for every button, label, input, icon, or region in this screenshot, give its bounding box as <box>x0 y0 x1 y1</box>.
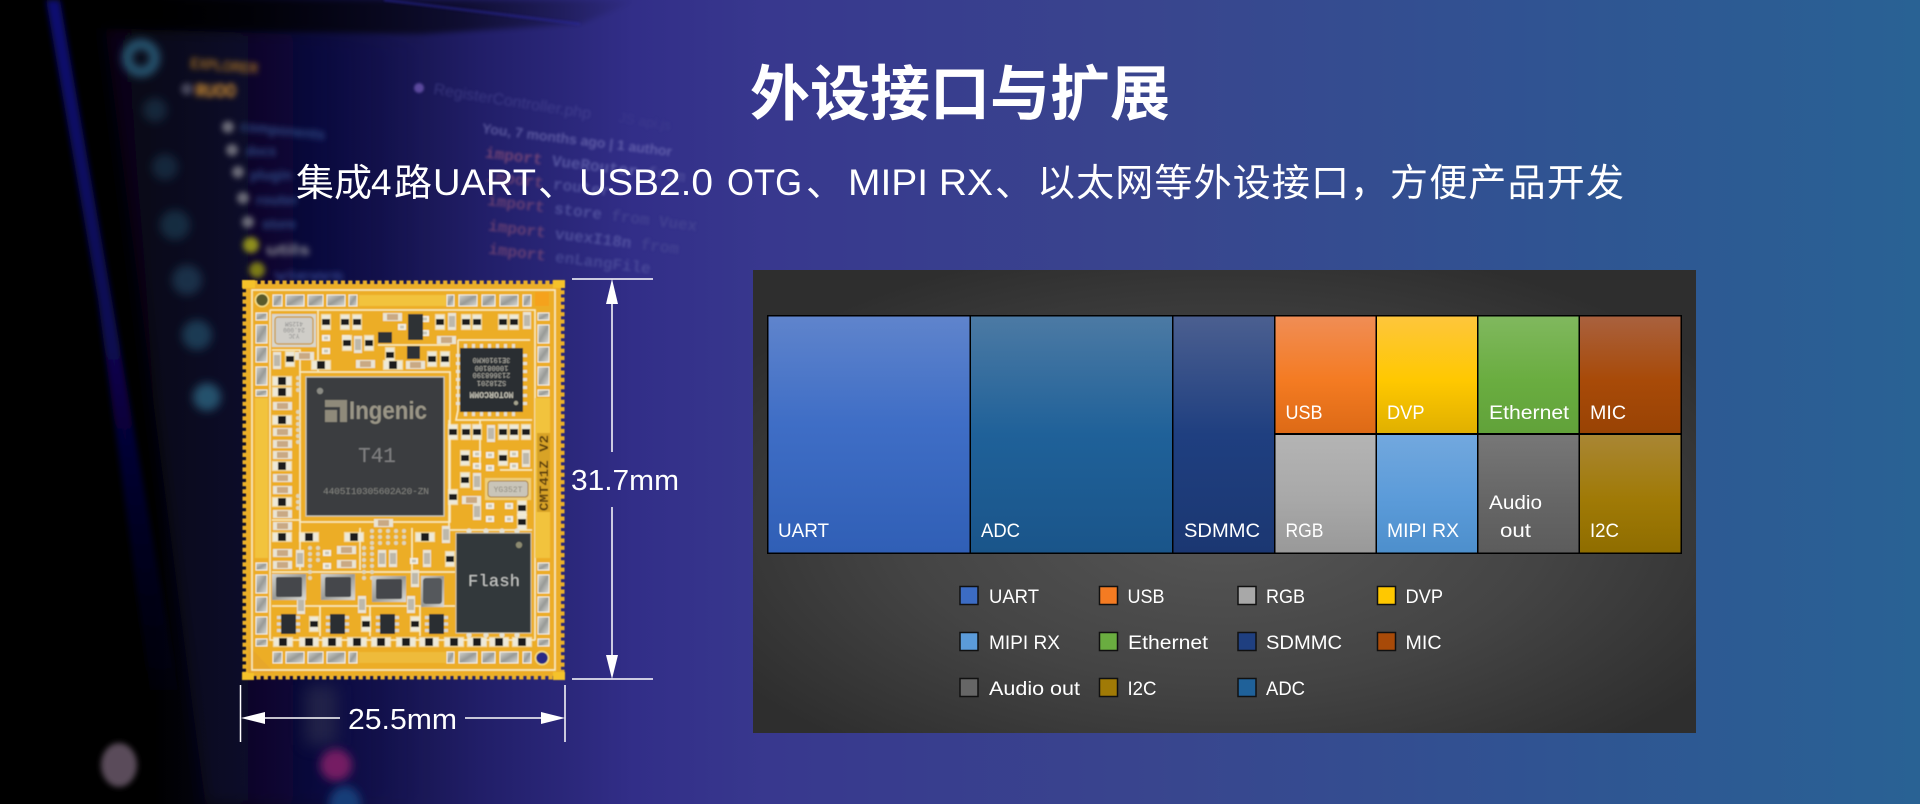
file explorer tree: plugin <box>250 167 292 184</box>
Motorcomm Ethernet PHY chip: 3E1910KM0 <box>473 355 510 363</box>
small transistors <box>378 314 423 359</box>
subtitle: 、 <box>995 163 1033 205</box>
file explorer tree: EXPLORER <box>190 55 259 78</box>
subtitle: UART <box>433 162 536 203</box>
cell: Audio out: out <box>1500 520 1532 542</box>
file explorer tree <box>181 55 344 283</box>
blurred code text: You, 7 months ago | 1 author <box>481 120 673 159</box>
cell: MIPI RX <box>1377 435 1477 552</box>
Ingenic T41 processor chip: 4405I10305602A20-ZN <box>323 486 429 497</box>
silver perimeter pads <box>256 295 549 663</box>
subtitle <box>296 162 1624 205</box>
castellated board edge <box>246 284 561 676</box>
cell: RGB: RGB <box>1286 520 1324 542</box>
crystal YG352T: YG352T <box>494 486 523 495</box>
legend: Audio out <box>989 678 1081 700</box>
Motorcomm Ethernet PHY chip: SZ18201 <box>477 378 506 386</box>
title: 外设接口与扩展 <box>750 61 1170 128</box>
blurred code text: import store from Vuex <box>486 192 699 236</box>
cell: USB <box>1276 316 1376 433</box>
blurred code text: import enLangFile <box>487 241 652 279</box>
subtitle: 4 <box>371 162 392 203</box>
legend: I2C <box>1128 678 1156 700</box>
cell: SDMMC: SDMMC <box>1184 520 1260 542</box>
subtitle: ， <box>1350 163 1388 205</box>
dimension: height 31.7mm <box>571 279 679 679</box>
dimension: width 25.5mm <box>240 685 565 742</box>
dimension: width 25.5mm: 25.5mm <box>348 704 457 736</box>
cell: Ethernet <box>1478 316 1578 433</box>
legend: UART <box>989 586 1039 608</box>
legend <box>960 586 1443 700</box>
gold bars <box>255 295 550 663</box>
board version label: CMT41Z V2 <box>537 435 552 511</box>
legend: SDMMC <box>1266 632 1342 654</box>
legend: RGB <box>1266 586 1305 608</box>
legend: USB <box>1128 586 1164 608</box>
legend: ADC <box>1266 678 1305 700</box>
cell: Audio out <box>1478 435 1578 552</box>
cell: Ethernet: Ethernet <box>1489 402 1570 424</box>
cell: SDMMC <box>1174 316 1274 552</box>
subtitle: USB2.0 <box>579 162 713 203</box>
file explorer tree: views <box>274 267 344 283</box>
cell: I2C: I2C <box>1590 520 1619 542</box>
Motorcomm Ethernet PHY chip: 10008100 <box>475 363 508 371</box>
subtitle: 方便产品开发 <box>1390 163 1624 205</box>
flash memory chip <box>456 528 531 638</box>
Ingenic T41 processor chip: Ingenic <box>349 397 427 425</box>
cell: RGB <box>1276 435 1376 552</box>
file explorer tree: utils <box>266 242 310 259</box>
Motorcomm Ethernet PHY chip: 213668390 <box>473 370 510 378</box>
dimension: height 31.7mm: 31.7mm <box>571 465 679 497</box>
photo: CMT41Z core board PCB <box>242 280 565 680</box>
file explorer tree: components <box>240 118 326 144</box>
flash memory chip: Flash <box>468 573 520 592</box>
cell: DVP <box>1377 316 1477 433</box>
sidebar icons <box>127 44 221 411</box>
Ingenic T41 processor chip: T41 <box>358 446 396 469</box>
crystal oscillator 24MHz: 4125M <box>285 320 303 327</box>
Motorcomm Ethernet PHY chip <box>456 344 527 416</box>
blurred code text: RegisterController.php <box>432 81 592 123</box>
blurred code text: JS api.js <box>618 109 672 133</box>
blurred code text: import router <box>485 168 611 201</box>
subtitle: 集成 <box>296 163 372 205</box>
treemap chart <box>767 315 1682 554</box>
panel: peripheral interface treemap <box>753 270 1696 733</box>
cell: UART <box>768 316 970 552</box>
file explorer tree: router <box>256 192 298 209</box>
cell: ADC <box>971 316 1172 552</box>
crystal oscillator 24MHz: YJC <box>288 332 299 339</box>
legend: DVP <box>1406 586 1443 608</box>
subtitle: 、 <box>806 163 844 205</box>
cell: MIC: MIC <box>1590 402 1626 424</box>
mounting holes <box>256 294 548 664</box>
subtitle: 路 <box>394 163 432 205</box>
crystal oscillator 24MHz <box>272 314 316 347</box>
subtitle: 以太网等外设接口 <box>1037 163 1349 205</box>
crystal oscillator 24MHz: 24.000 <box>283 326 305 333</box>
Ingenic T41 processor chip <box>306 377 444 516</box>
file explorer tree: docs <box>246 143 276 160</box>
file explorer tree: RUOO <box>196 81 236 101</box>
Motorcomm Ethernet PHY chip: MOTORCOMM <box>470 389 514 399</box>
cell: Audio out: Audio <box>1489 492 1542 514</box>
small passive components <box>272 312 532 647</box>
legend: Ethernet <box>1128 632 1209 654</box>
SOT regulators <box>277 614 448 634</box>
subtitle: MIPI RX <box>848 162 993 203</box>
cell: DVP: DVP <box>1387 402 1424 424</box>
cell: USB: USB <box>1286 402 1322 424</box>
blurred code text: import vuexI18n from <box>487 218 680 259</box>
cell: I2C <box>1580 435 1680 552</box>
bokeh light spots <box>101 685 361 804</box>
power inductors <box>272 574 444 607</box>
subtitle: 、 <box>538 163 576 205</box>
blurred code text <box>414 81 707 284</box>
legend: MIC <box>1406 632 1442 654</box>
cell: UART: UART <box>778 520 829 542</box>
crystal YG352T <box>485 478 531 500</box>
file explorer tree: store <box>262 216 296 233</box>
legend: MIPI RX <box>989 632 1060 654</box>
blurred code text: import VueRouter from <box>484 145 687 187</box>
subtitle: OTG <box>727 162 802 203</box>
cell: ADC: ADC <box>981 520 1020 542</box>
cell: MIC <box>1580 316 1680 433</box>
silkscreen traces <box>252 290 555 670</box>
cell: MIPI RX: MIPI RX <box>1387 520 1459 542</box>
